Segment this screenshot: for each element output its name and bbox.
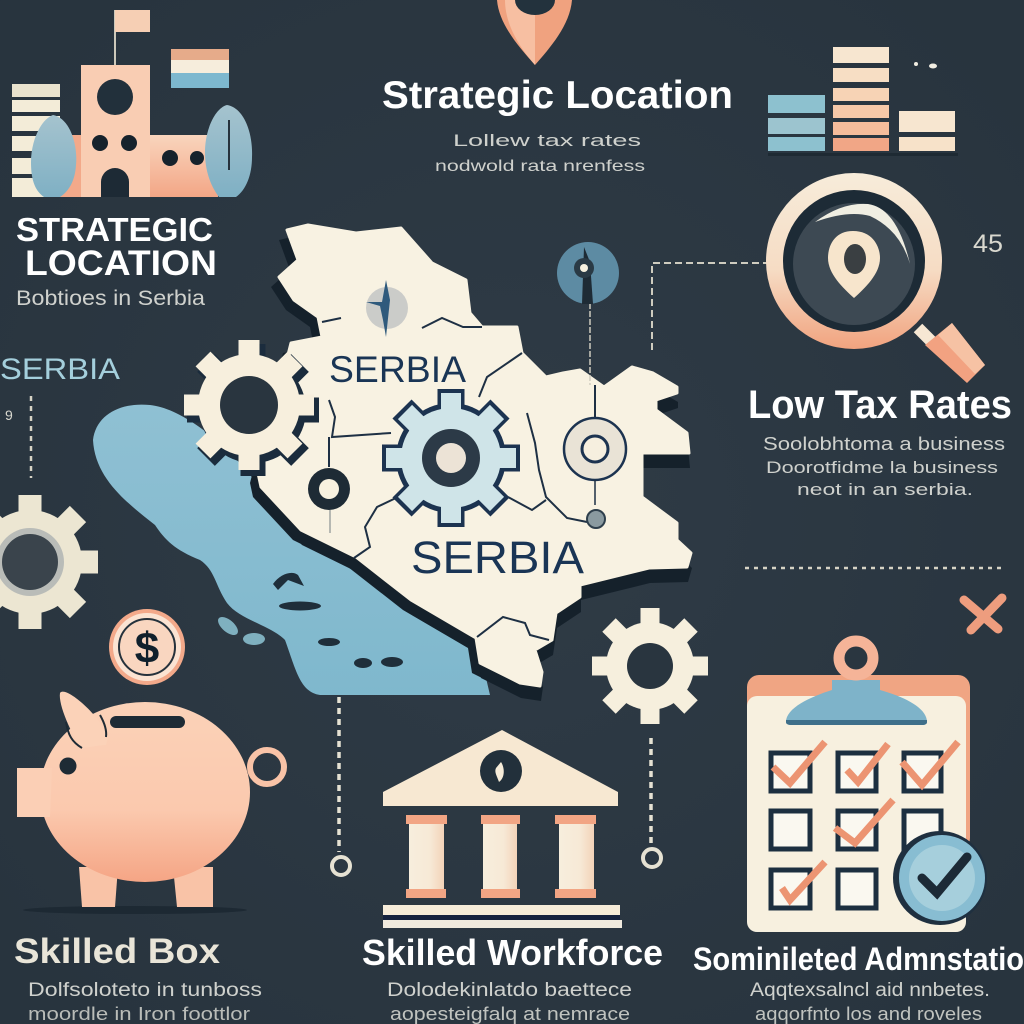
decorative: dashed divider <box>745 567 1002 569</box>
icon: clipboard checklist <box>747 641 987 932</box>
icon: gear far left <box>0 495 98 629</box>
text: serbia lower map label: SERBIA <box>411 532 584 583</box>
icon: dollar coin: $ <box>135 624 159 673</box>
text: skilled workforce description <box>387 980 632 1024</box>
map: sea islands <box>215 573 403 668</box>
title: low tax rates: Low Tax Rates <box>748 383 1012 427</box>
map: serbia <box>258 225 691 686</box>
map: region borders <box>322 318 587 640</box>
icon: ring marker right <box>564 418 626 528</box>
text: skilled workforce description: aopesteigfalq at nemrace <box>390 1004 630 1024</box>
text: low tax description: Soolobhtoma a business <box>763 434 1005 454</box>
icon: bank <box>383 730 622 928</box>
icon: piggy bank <box>17 692 284 914</box>
text: low tax description: Doorotfidme la business <box>766 458 998 477</box>
map: sea <box>93 405 490 695</box>
text: centre caption <box>435 131 645 175</box>
title: strategic location left: LOCATION <box>25 244 217 283</box>
icon: gear centre <box>382 389 520 527</box>
text: skilled box description: moordle in Iron foottlor <box>28 1004 250 1024</box>
text: number 45: 45 <box>973 230 1003 258</box>
icon: top location pin <box>497 0 572 65</box>
text: low tax description: neot in an serbia. <box>797 480 973 499</box>
icon: gear lower right <box>592 608 708 724</box>
map: serbia shadow <box>250 235 683 696</box>
icon: dollar coin <box>109 609 185 685</box>
text: skilled box description <box>28 980 262 1024</box>
icon: gear left <box>184 340 319 476</box>
title: strategic location centre: Strategic Location <box>382 74 733 117</box>
text: centre caption: Lollew tax rates <box>453 131 641 150</box>
title: strategic location left <box>16 211 217 283</box>
text: administration description <box>750 980 990 1024</box>
icon: map pin compass <box>366 280 408 337</box>
connector: dots <box>332 697 661 875</box>
text: low tax description <box>763 434 1005 499</box>
icon: ring marker left <box>308 468 350 510</box>
icon: magnifying glass <box>652 173 985 383</box>
chart: stacked bars <box>768 47 958 156</box>
icon: government building <box>12 10 252 197</box>
text: centre caption: nodwold rata nrenfess <box>435 158 645 175</box>
text: administration description: Aqqtexsalncl aid nnbetes. <box>750 980 990 1001</box>
decorative marker: left dash <box>5 396 31 478</box>
title: strategic location left: STRATEGIC <box>16 211 213 248</box>
text: serbia upper map label: SERBIA <box>329 349 466 390</box>
text: skilled workforce description: Dolodekinlatdo baettece <box>387 980 632 1001</box>
text: skilled box: Skilled Box <box>14 932 221 971</box>
text: left caption: Bobtioes in Serbia <box>16 287 205 310</box>
text: administration description: aqqorfnto los and roveles <box>755 1004 982 1024</box>
map: serbia shadow right <box>259 240 692 701</box>
text: skilled box description: Dolfsoloteto in tunboss <box>28 980 262 1001</box>
icon: cross <box>964 598 1002 630</box>
title: skilled workforce: Skilled Workforce <box>362 932 663 973</box>
decorative marker: left dash: 9 <box>5 407 13 423</box>
icon: blue location circle <box>557 242 619 420</box>
text: serbia side label: SERBIA <box>0 353 120 386</box>
